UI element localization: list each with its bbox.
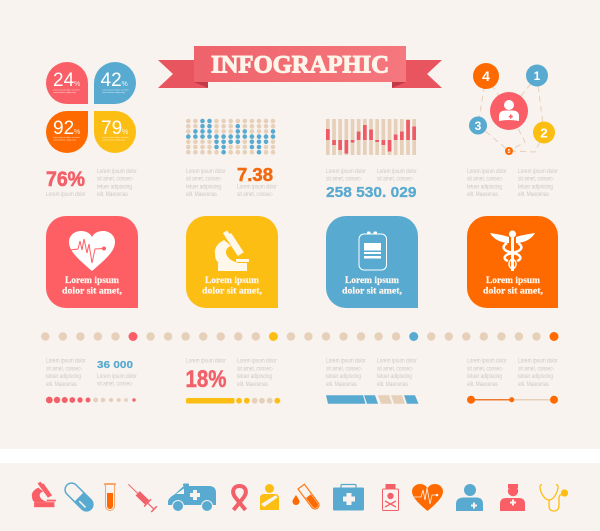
node 1: 1 <box>534 69 541 83</box>
panel: microscope card <box>186 216 278 308</box>
stat 76%: Lorem ipsum dolor <box>46 192 86 198</box>
text block: Lorem ipsum dolor <box>377 169 417 175</box>
timeline dots <box>41 332 559 341</box>
text block: elit. Maecenas <box>518 192 549 198</box>
icon: caduceus <box>490 230 535 271</box>
text block: Lorem ipsum dolor <box>46 358 86 365</box>
text block: sit amet, consec- <box>46 366 82 373</box>
icon: first aid kit <box>333 484 364 510</box>
text block: tetuer adipiscing <box>518 374 553 380</box>
node 5: 5 <box>508 149 511 155</box>
panel: caduceus card <box>467 216 558 308</box>
petal 79% <box>94 111 136 153</box>
text block: elit. Maecenas <box>97 192 128 198</box>
text block: tetuer adipiscing <box>377 374 412 380</box>
text block: sit amet, consec- <box>467 176 503 183</box>
icon: ambulance <box>168 484 216 512</box>
panel: heart card: Lorem ipsum <box>65 275 120 285</box>
dot matrix chart <box>186 119 275 154</box>
icon: heart with pulse <box>69 231 115 271</box>
text block: Lorem ipsum dolor <box>518 358 558 365</box>
text block: elit. Maecenas <box>326 381 357 388</box>
petal 79%: Lorem ipsum dolor sit amet <box>102 137 128 139</box>
panel: blood bag card: dolor sit amet, <box>342 286 402 296</box>
yellow progress bar <box>186 398 280 404</box>
petal chart <box>46 62 136 153</box>
white band <box>0 449 600 463</box>
stat 36 000: 36 000 <box>97 359 133 371</box>
panel: microscope card: dolor sit amet, <box>202 286 262 296</box>
text block: sit amet, consec- <box>97 176 133 183</box>
text block: elit. Maecenas <box>46 381 77 388</box>
icon: microscope <box>32 482 56 507</box>
petal 79%: 79 <box>101 118 122 139</box>
text block: tetuer adipiscing <box>237 374 272 380</box>
petal 24% <box>46 62 88 104</box>
text block: Lorem ipsum dolor <box>326 169 366 175</box>
icon: test tube pouring <box>292 484 321 511</box>
icon: stethoscope <box>540 484 568 511</box>
petal 24%: consectetuer adipiscing <box>53 91 77 94</box>
icon: poison bottle <box>382 484 398 510</box>
petal 79%: % <box>122 129 128 136</box>
text block: sit amet, consec- <box>326 176 362 183</box>
icon: blood bag <box>359 232 386 270</box>
stat 36 000: Lorem ipsum dolor <box>97 374 137 380</box>
icon: nurse <box>500 484 525 511</box>
icon: microscope <box>215 230 249 271</box>
panel: blood bag card <box>326 216 418 308</box>
panel: heart card <box>46 216 138 308</box>
title ribbon <box>158 46 442 88</box>
stat 258 530. 029: 258 530. 029 <box>326 184 416 201</box>
stat 7.38: 7.38 <box>237 165 273 185</box>
diverging bar chart <box>326 119 416 155</box>
node 3: 3 <box>475 119 482 133</box>
node 2: 2 <box>540 126 548 140</box>
network diagram <box>469 63 555 155</box>
text block: elit. Maecenas <box>186 192 217 198</box>
panel: microscope card: Lorem ipsum <box>205 275 260 285</box>
text block: Lorem ipsum dolor <box>377 358 417 365</box>
text block: sit amet, consec- <box>377 176 413 183</box>
text block: elit. Maecenas <box>467 192 498 198</box>
stat 36 000: sit amet, consec- <box>97 381 133 388</box>
text block: sit amet, consec- <box>377 366 413 373</box>
panel: heart card: dolor sit amet, <box>62 286 122 296</box>
petal 42%: % <box>122 81 128 88</box>
petal 92%: 92 <box>53 118 74 139</box>
stat 7.38 <box>237 165 277 198</box>
text block: tetuer adipiscing <box>326 374 361 380</box>
text block: Lorem ipsum dolor <box>326 358 366 365</box>
text block: tetuer adipiscing <box>46 374 81 380</box>
panel: caduceus card: dolor sit amet, <box>483 286 543 296</box>
icon: awareness ribbon <box>233 486 246 510</box>
text block: sit amet, consec- <box>467 366 503 373</box>
text block: sit amet, consec- <box>518 176 554 183</box>
stat 18%: 18% <box>186 366 227 393</box>
text block: sit amet, consec- <box>518 366 554 373</box>
icon: doctor <box>456 484 483 511</box>
text block: elit. Maecenas <box>237 381 268 388</box>
petal 42%: 42 <box>100 70 122 91</box>
text block: tetuer adipiscing <box>467 374 502 380</box>
petal 92%: % <box>74 129 80 136</box>
text block: elit. Maecenas <box>467 381 498 388</box>
text block: Lorem ipsum dolor <box>518 169 558 175</box>
petal 24%: % <box>74 81 80 88</box>
segmented parallelogram bar <box>326 395 418 404</box>
text block: Lorem ipsum dolor <box>237 358 277 365</box>
text block: elit. Maecenas <box>518 381 549 388</box>
petal 24%: 24 <box>53 70 75 91</box>
petal 42%: consectetuer adipiscing <box>102 91 126 94</box>
text block: tetuer adipiscing <box>518 184 553 191</box>
panel: caduceus card: Lorem ipsum <box>486 275 541 285</box>
stat 7.38: sit amet, consec- <box>237 192 273 198</box>
text block: sit amet, consec- <box>326 366 362 373</box>
icon: pill <box>62 480 96 514</box>
petal 42%: Lorem ipsum dolor sit amet <box>102 90 128 92</box>
icon row <box>32 480 567 514</box>
petal 92% <box>46 111 88 153</box>
icon: patient with sling <box>260 484 279 510</box>
text block: elit. Maecenas <box>377 381 408 388</box>
text block: tetuer adipiscing <box>97 184 132 191</box>
node 4: 4 <box>482 68 490 84</box>
text block: tetuer adipiscing <box>467 184 502 191</box>
text block: Lorem ipsum dolor <box>467 358 507 365</box>
shrinking dots gauge <box>46 397 136 403</box>
text block: Lorem ipsum dolor <box>467 169 507 175</box>
icon: test tube <box>104 483 116 510</box>
text block: sit amet, consec- <box>237 366 273 373</box>
icon: orange heart <box>412 484 443 511</box>
text block: sit amet, consec- <box>186 176 222 183</box>
stat 36 000 <box>97 359 137 388</box>
stat 76%: 76% <box>46 168 85 191</box>
panel: blood bag card: Lorem ipsum <box>345 275 400 285</box>
text block: Lorem ipsum dolor <box>186 169 226 175</box>
text block: Lorem ipsum dolor <box>97 169 137 175</box>
icon: syringe <box>125 481 158 513</box>
title: INFOGRAPHIC <box>211 51 389 78</box>
orange slider <box>467 396 558 404</box>
petal 92%: consectetuer adipiscing <box>53 138 77 141</box>
text block: tetuer adipiscing <box>186 184 221 191</box>
text block: Lorem ipsum dolor <box>186 358 226 365</box>
icon: doctor <box>499 100 519 121</box>
petal 92%: Lorem ipsum dolor sit amet <box>53 137 79 139</box>
petal 79%: consectetuer adipiscing <box>102 138 126 141</box>
petal 24%: Lorem ipsum dolor sit amet <box>53 90 79 92</box>
petal 42% <box>94 62 136 104</box>
stat 7.38: Lorem ipsum dolor <box>237 184 277 191</box>
